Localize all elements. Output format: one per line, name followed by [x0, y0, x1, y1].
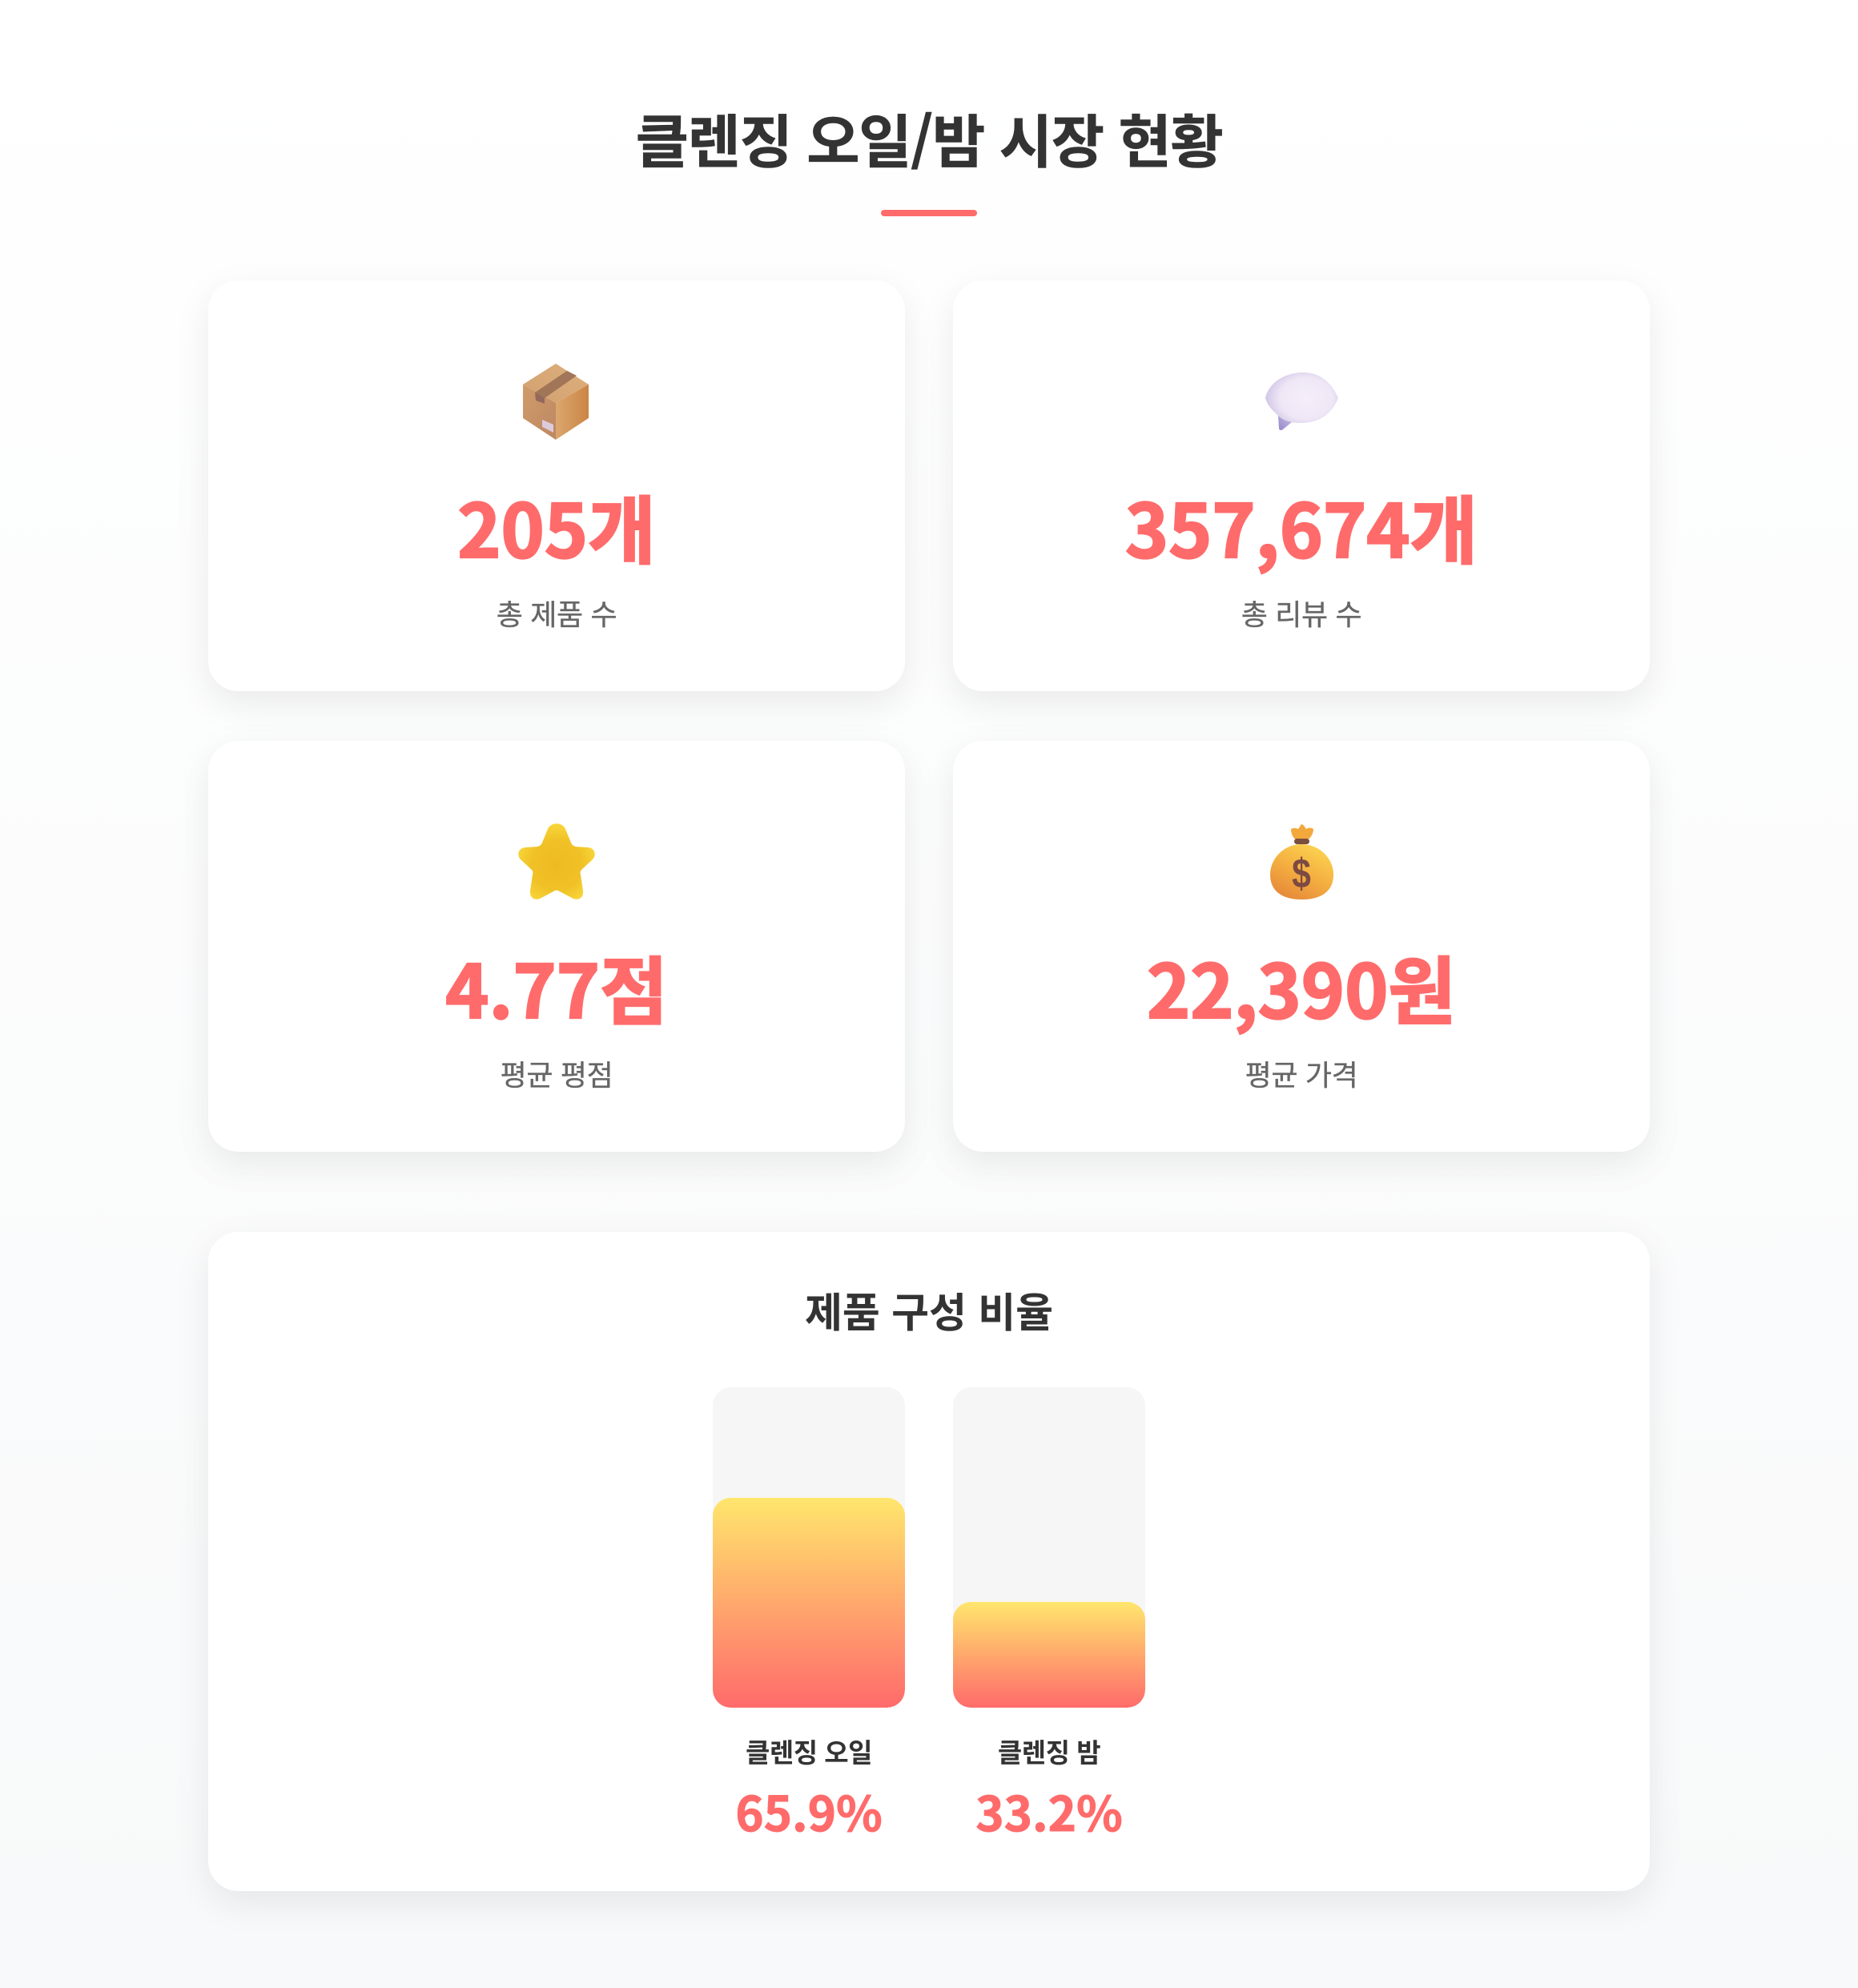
- bar label: cleansing balm: 클렌징 밤: [998, 1732, 1100, 1770]
- value: 205개: [457, 473, 656, 579]
- bar value: cleansing balm: 33.2%: [975, 1776, 1123, 1845]
- label: 총 제품 수: [497, 592, 617, 634]
- bar value: cleansing oil: 65.9%: [735, 1776, 883, 1845]
- label: 총 리뷰 수: [1241, 592, 1361, 634]
- label: 평균 가격: [1245, 1052, 1357, 1094]
- chart title: 제품 구성 비율: [805, 1280, 1053, 1339]
- panel: product composition: [208, 1232, 1650, 1891]
- panel: total reviews: [953, 280, 1650, 691]
- bar: cleansing balm: [953, 1387, 1145, 1708]
- icon: star: [518, 823, 595, 899]
- title: 클렌징 오일/밤 시장 현황: [636, 95, 1222, 179]
- icon: money bag: [1270, 824, 1333, 899]
- icon: package box: [523, 364, 589, 440]
- title underline accent: [881, 210, 977, 216]
- value: 22,390원: [1147, 933, 1456, 1040]
- panel: average price: [953, 741, 1650, 1152]
- label: 평균 평점: [501, 1052, 613, 1094]
- icon: money bag: $: [1292, 851, 1311, 897]
- panel: total products: [208, 280, 905, 691]
- value: 357,674개: [1125, 473, 1478, 579]
- panel: average rating: [208, 741, 905, 1152]
- value: 4.77점: [445, 933, 668, 1040]
- icon: speech bubble: [1265, 372, 1338, 430]
- bar: cleansing oil: [713, 1387, 905, 1708]
- bar label: cleansing oil: 클렌징 오일: [746, 1732, 872, 1770]
